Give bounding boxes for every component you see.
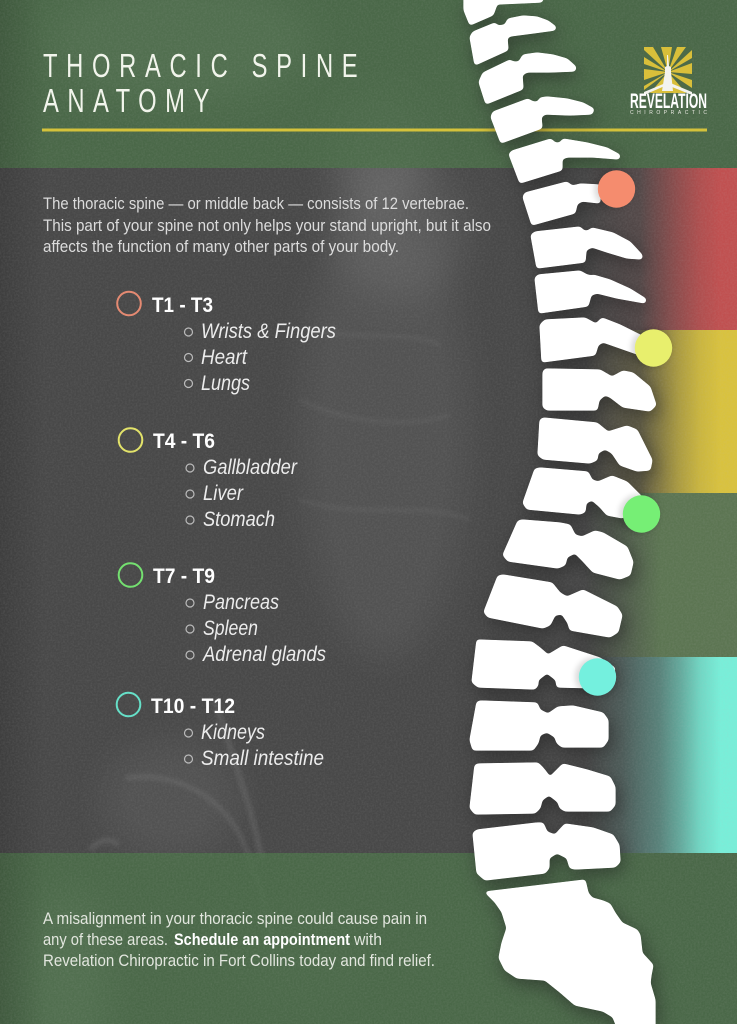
heading: T7 - T9: T7 - T9 (153, 565, 215, 588)
title (43, 48, 358, 120)
closing text block: any of these areas. (43, 930, 168, 949)
marker: teal dot (579, 658, 616, 696)
items: T7 - T9: Pancreas (203, 591, 279, 614)
panel: bottom green band (0, 853, 737, 1024)
marker: salmon dot (598, 170, 635, 208)
icon: yellow ring (119, 428, 142, 452)
vertebra 8 (540, 318, 650, 362)
vertebra 10 (538, 418, 652, 471)
vertebra 1 (470, 16, 556, 65)
closing text block: Revelation Chiropractic in Fort Collins today and find relief. (43, 951, 435, 970)
items: T4 - T6 (186, 456, 298, 531)
items: T10 - T12 (184, 721, 324, 770)
title: THORACIC SPINE (43, 48, 358, 85)
vertebra 15 (470, 701, 608, 750)
panel: top green band (0, 0, 737, 168)
panel: teal color band (585, 657, 737, 853)
items: T10 - T12: Small intestine (201, 747, 324, 770)
items: T4 - T6: Stomach (203, 508, 275, 531)
closing text block: with (353, 930, 382, 949)
items: T1 - T3: Heart (201, 346, 248, 369)
intro text block: This part of your spine not only helps your stand upright, but it also (43, 216, 491, 235)
logo icon: sunburst lighthouse (644, 47, 692, 95)
heading: T1 - T3: T1 - T3 (152, 294, 213, 317)
items: T4 - T6: Gallbladder (203, 456, 298, 479)
icon: green ring (119, 563, 142, 587)
intro text block: affects the function of many other parts of your body. (43, 237, 399, 256)
logo tagline: CHIROPRACTIC (630, 110, 707, 116)
vertebra: top partial (464, 0, 544, 25)
list: T1 - T3 (117, 292, 336, 395)
panel: red color band (585, 168, 737, 330)
logo: Revelation Chiropractic (630, 47, 707, 116)
items: T4 - T6: Liver (203, 482, 244, 505)
vertebra 9 (543, 369, 656, 411)
vertebra 4 (509, 139, 620, 183)
list: T10 - T12 (117, 693, 324, 770)
vertebra 17 (473, 823, 620, 880)
sacrum (485, 880, 655, 1024)
list: T4 - T6 (119, 428, 298, 531)
intro text block: The thoracic spine — or middle back — consists of 12 vertebrae. (43, 194, 469, 213)
vertebra 5 (523, 182, 600, 225)
closing text block: A misalignment in your thoracic spine could cause pain in (43, 909, 427, 928)
items: T7 - T9 (186, 591, 326, 666)
marker: green dot (623, 495, 660, 533)
vertebra 3 (491, 97, 594, 143)
items: T7 - T9: Adrenal glands (201, 643, 326, 666)
title underline (42, 128, 707, 132)
vertebra 14 (472, 640, 615, 689)
items: T1 - T3 (184, 320, 336, 395)
items: T1 - T3: Wrists & Fingers (201, 320, 336, 343)
vertebra 2 (479, 53, 576, 104)
vertebra 7 (535, 271, 646, 313)
panel: yellow color band (585, 330, 737, 493)
vertebra 11 (523, 468, 642, 518)
closing text block (43, 909, 435, 970)
items: T1 - T3: Lungs (201, 372, 250, 395)
title: ANATOMY (43, 83, 209, 120)
intro text block (43, 194, 491, 256)
vertebra 12 (503, 520, 633, 579)
items: T7 - T9: Spleen (203, 617, 258, 640)
vertebra 16 (470, 763, 615, 814)
heading: T10 - T12: T10 - T12 (151, 695, 235, 718)
panel: green color band (585, 493, 737, 657)
vertebra 6 (531, 227, 642, 268)
heading: T4 - T6: T4 - T6 (153, 430, 215, 453)
marker: yellow dot (635, 329, 672, 367)
vertebra 13 (484, 575, 622, 637)
items: T10 - T12: Kidneys (201, 721, 265, 744)
icon: salmon ring (117, 292, 141, 315)
spine illustration (464, 0, 656, 1024)
icon: teal ring (117, 693, 140, 716)
closing text block: Schedule an appointment (174, 930, 350, 949)
list: T7 - T9 (119, 563, 326, 666)
